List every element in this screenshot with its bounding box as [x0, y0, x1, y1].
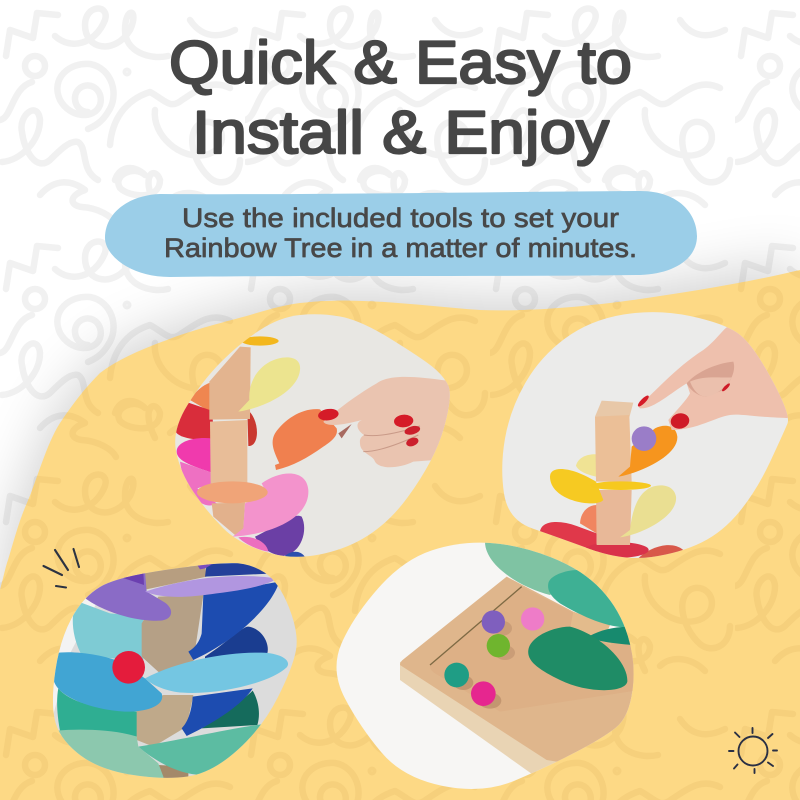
subtitle text: [164, 203, 637, 263]
icon: sun: [729, 728, 777, 773]
icon: spark lines: [44, 549, 79, 588]
callout: blue subtitle pill: [105, 191, 697, 277]
photo: hand placing orange leaf on tower: [175, 314, 450, 557]
soft shadow above yellow panel: [0, 264, 800, 794]
panel: yellow blob: [0, 270, 800, 800]
title: Install & Enjoy: [192, 99, 609, 166]
subtitle text: Rainbow Tree in a matter of minutes.: [164, 233, 637, 263]
photo: close-up of blue and green leaves with red ball: [52, 563, 297, 778]
title: [169, 29, 632, 166]
photo: wooden tray with coloured balls: [336, 542, 634, 789]
title: Quick & Easy to: [169, 29, 632, 96]
subtitle text: Use the included tools to set your: [182, 203, 619, 233]
photo: hand adding purple ball: [502, 312, 788, 558]
